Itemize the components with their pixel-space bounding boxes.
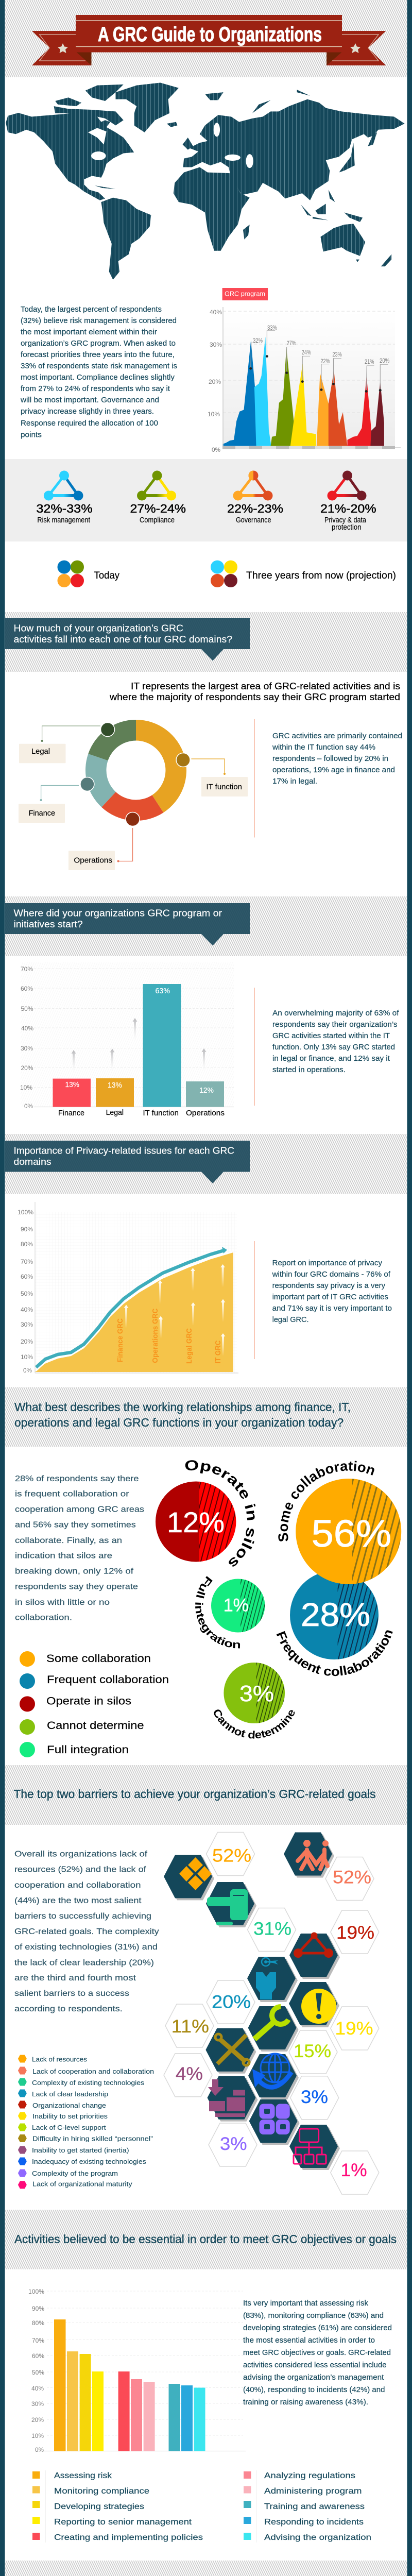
bubble: full integration 1%: Full integration bbox=[195, 1576, 240, 1649]
rotated domain labels: Legal GRC bbox=[185, 1328, 194, 1364]
bubble: cannot determine 3% bbox=[214, 1663, 295, 1739]
intro paragraph: organization’s GRC program. When asked to bbox=[21, 340, 176, 348]
rotated domain labels: Operations GRC bbox=[151, 1308, 160, 1363]
section header: working relationships: What best describes the working relationships among finance, IT, bbox=[14, 1400, 351, 1414]
panel: percentages band: Governance bbox=[236, 516, 271, 524]
intro paragraph: Response required the allocation of 100 bbox=[21, 419, 158, 428]
text: essential activities bbox=[243, 2299, 392, 2406]
hexagon percentages: 3% bbox=[220, 2134, 247, 2154]
panel: percentages band: Risk management bbox=[37, 516, 91, 524]
legend: barriers: Lack of clear leadership bbox=[32, 2090, 108, 2098]
bar chart: essential activities: 80% bbox=[32, 2319, 44, 2327]
intro paragraph: privacy increase slightly in three years. bbox=[21, 408, 154, 416]
text: barriers: (44%) are the two most salient bbox=[14, 1896, 142, 1905]
text: collaboration: indication that silos are bbox=[15, 1552, 112, 1560]
text: collaboration: in silos with little or no bbox=[15, 1598, 110, 1607]
text: barriers: salient barriers to a success bbox=[14, 1989, 129, 1998]
text: privacy report: within four GRC domains - 76% of bbox=[272, 1270, 391, 1279]
donut chart: GRC domains: Operations bbox=[74, 856, 112, 865]
value labels: 32% bbox=[253, 337, 263, 344]
legend: essential activities: Monitoring compliance bbox=[54, 2487, 149, 2496]
icon: resources diamonds bbox=[179, 1857, 212, 1890]
text: privacy report: and 71% say it is very important to bbox=[272, 1304, 392, 1313]
section header: privacy importance bbox=[5, 1134, 407, 1194]
intro paragraph: from 27% to 24% of respondents who say it bbox=[21, 385, 170, 393]
bar chart: essential activities: 20% bbox=[31, 2416, 44, 2424]
bar values: 13% bbox=[108, 1081, 122, 1090]
bar values: 63% bbox=[156, 987, 170, 995]
chart background bbox=[223, 311, 395, 446]
text: collaboration: 28% of respondents say there bbox=[15, 1475, 139, 1483]
legend: barriers: Lack of cooperation and collaboration bbox=[32, 2067, 154, 2075]
hexagon percentages: 20% bbox=[212, 1992, 251, 2012]
chart: GRC program: 27% bbox=[287, 340, 296, 347]
hexagon percentages: 11% bbox=[171, 2016, 209, 2037]
icon: inertia bbox=[208, 2079, 245, 2117]
text: barriers: resources (52%) and the lack of bbox=[14, 1866, 146, 1874]
percent figures and labels: 22%-23% bbox=[227, 502, 283, 515]
legend: essential activities: Assessing risk bbox=[54, 2471, 112, 2480]
text: collaboration: breaking down, only 12% of bbox=[15, 1567, 134, 1576]
area chart: privacy importance: 20% bbox=[21, 1338, 33, 1345]
chart: GRC program: 21% bbox=[365, 358, 374, 365]
text: barriers: according to respondents. bbox=[14, 2005, 123, 2013]
text: essential activities: activities considered less essential include bbox=[243, 2361, 386, 2369]
text: overwhelming majority bbox=[254, 988, 400, 1106]
donut chart: GRC domains: Finance bbox=[29, 809, 55, 818]
area chart: privacy importance: 90% bbox=[21, 1226, 33, 1233]
ground bar bbox=[222, 446, 395, 449]
area chart: privacy importance: 70% bbox=[21, 1258, 33, 1265]
bar chart: essential activities: 40% bbox=[31, 2385, 44, 2392]
percent figures and labels bbox=[36, 502, 376, 515]
bars bbox=[53, 1079, 91, 1107]
legend: essential activities: Administering program bbox=[264, 2487, 362, 2496]
text: overwhelming majority: started in operations. bbox=[272, 1066, 346, 1074]
hexagon percentages: 3% bbox=[301, 2087, 328, 2107]
text: GRC activities: within the IT function say 44% bbox=[272, 743, 375, 752]
text: GRC activities: respondents – followed by 20% in bbox=[272, 755, 388, 763]
legend: barriers: Complexity of the program bbox=[32, 2170, 118, 2177]
section header: working relationships: operations and legal GRC functions in your organization today? bbox=[14, 1416, 344, 1429]
legend: collaboration: Some collaboration bbox=[46, 1653, 151, 1665]
rotated domain labels: Finance GRC bbox=[116, 1318, 125, 1362]
text: privacy report: Report on importance of privacy bbox=[272, 1259, 383, 1267]
text: essential activities: (83%), monitoring compliance (63%) and bbox=[243, 2312, 384, 2320]
percent figures and labels: 27%-24% bbox=[130, 502, 186, 515]
axis labels: 70% bbox=[21, 965, 33, 973]
legend: barriers: Lack of organizational maturity bbox=[32, 2180, 132, 2188]
percent figures and labels: 32%-33% bbox=[36, 502, 93, 515]
text: privacy report bbox=[254, 1241, 392, 1359]
intro paragraph: points bbox=[21, 431, 42, 439]
intro paragraph: Today, the largest percent of respondents bbox=[21, 306, 162, 314]
panel: percentages band: Compliance bbox=[140, 516, 175, 524]
legend: barriers: Complexity of existing technologies bbox=[32, 2079, 145, 2087]
categories: Finance bbox=[58, 1109, 84, 1117]
bar chart: where GRC started: IT function bbox=[143, 1109, 179, 1117]
GRC program tag: GRC program bbox=[225, 290, 265, 298]
icon: risk management triangle bbox=[44, 471, 83, 501]
section header: privacy importance: Importance of Privacy-related issues for each GRC bbox=[13, 1146, 234, 1156]
text: collaboration: cooperation among GRC areas bbox=[15, 1505, 144, 1514]
bubble: some collaboration 56% bbox=[278, 1461, 402, 1584]
section header: privacy importance: domains bbox=[13, 1157, 52, 1167]
label boxes bbox=[19, 744, 248, 870]
percent figures and labels: 21%-20% bbox=[320, 502, 376, 515]
legend: barriers: Lack of C-level support bbox=[32, 2124, 106, 2131]
chart: GRC program: 22% bbox=[320, 358, 330, 365]
bar chart: where GRC started: Operations bbox=[186, 1109, 225, 1117]
text: privacy report: important part of IT GRC activities bbox=[272, 1293, 388, 1301]
bubble: operate in silos 12%: Operate in silos bbox=[185, 1460, 255, 1567]
hexagon percentages: 52% bbox=[333, 1868, 371, 1888]
bar chart: where GRC started bbox=[20, 962, 234, 1117]
header stripe panel bbox=[5, 0, 407, 77]
text: collaboration: and 56% say they sometimes bbox=[15, 1521, 136, 1530]
intro paragraph: (32%) believe risk management is considered bbox=[21, 317, 177, 325]
intro paragraph: forecast priorities three years into the future, bbox=[21, 351, 175, 359]
panel: percentages band: Privacy & data bbox=[324, 516, 367, 524]
bubble: some collaboration 56%: 56% bbox=[312, 1512, 391, 1555]
legend: collaboration: Frequent collaboration bbox=[47, 1674, 169, 1686]
legend: collaboration bbox=[20, 1651, 169, 1757]
section header: where started: initiatives start? bbox=[13, 919, 83, 929]
bar values: 12% bbox=[199, 1086, 214, 1095]
icon: organizational change bbox=[295, 1934, 332, 1957]
icon: priorities exclamation bbox=[301, 1989, 336, 2024]
chart: GRC program: 30% bbox=[210, 341, 222, 348]
connector lines bbox=[41, 726, 225, 861]
hexagon percentages: 15% bbox=[294, 2041, 331, 2061]
bubble: operate in silos 12% bbox=[156, 1460, 255, 1567]
bar chart: where GRC started: 10% bbox=[20, 1084, 32, 1091]
bar chart: where GRC started: 50% bbox=[21, 1005, 33, 1012]
hexagon percentages: 52% bbox=[212, 1845, 251, 1866]
bar chart: essential activities: 70% bbox=[32, 2337, 44, 2344]
legend: barriers: Inability to set priorities bbox=[32, 2112, 108, 2120]
text: GRC activities bbox=[254, 719, 402, 838]
text: essential activities: meet GRC objectives or goals. GRC-related bbox=[243, 2349, 391, 2357]
bar chart: essential activities: 60% bbox=[32, 2352, 44, 2360]
legend: today vs projection bbox=[58, 561, 396, 587]
bar chart: where GRC started: 40% bbox=[21, 1025, 33, 1032]
legend: barriers: Lack of resources bbox=[32, 2055, 88, 2063]
text: barriers: the lack of clear leadership (20%) bbox=[14, 1959, 154, 1967]
chart: GRC program: 24% bbox=[302, 349, 311, 356]
legend: essential activities: Reporting to senior management bbox=[54, 2518, 192, 2527]
section header: where started bbox=[5, 896, 407, 956]
chart: GRC program: 23% bbox=[332, 351, 342, 358]
hexagon percentages bbox=[171, 1845, 374, 2180]
bubble: cannot determine 3%: Cannot determine bbox=[214, 1709, 295, 1739]
icon: org chart bbox=[294, 2129, 326, 2164]
text: collaboration: collaborate. Finally, as an bbox=[15, 1536, 122, 1545]
text: overwhelming majority: in legal or finance, and 12% say it bbox=[272, 1055, 390, 1063]
bubble: frequent collaboration 28%: Frequent collaboration bbox=[276, 1630, 393, 1676]
legend: essential activities: Advising the organization bbox=[264, 2533, 371, 2542]
intro paragraph: most important. Compliance declines slightly bbox=[21, 374, 175, 382]
text: barriers: GRC-related goals. The complexity bbox=[14, 1927, 159, 1936]
text: overwhelming majority: An overwhelming majority of 63% of bbox=[272, 1009, 400, 1018]
icon: compliance triangle bbox=[137, 471, 176, 501]
section header: GRC domains: activities fall into each one of four GRC domains? bbox=[13, 634, 232, 645]
icon: people bbox=[298, 1840, 329, 1869]
icon: leadership bbox=[256, 1958, 278, 1999]
area chart: privacy importance: 60% bbox=[21, 1273, 33, 1280]
bar values: 13% bbox=[65, 1080, 79, 1089]
bars bbox=[54, 2319, 66, 2451]
legend: barriers: Inadequacy of existing technologies bbox=[32, 2158, 146, 2165]
icon: technology bbox=[207, 1889, 248, 1925]
hexagon percentages: 31% bbox=[253, 1919, 291, 1939]
text: overwhelming majority: function. Only 13% say GRC started bbox=[272, 1043, 395, 1052]
icon: tools bbox=[215, 2034, 249, 2065]
arrows bbox=[71, 1018, 206, 1074]
section header: working relationships bbox=[5, 1387, 407, 1447]
intro paragraph bbox=[20, 306, 177, 439]
legend: collaboration: Cannot determine bbox=[47, 1720, 144, 1732]
area chart: privacy importance: 40% bbox=[21, 1306, 33, 1313]
text: essential activities: developing strategies (61%) are considered bbox=[243, 2324, 392, 2332]
hexagon percentages: 1% bbox=[341, 2160, 367, 2180]
icon: wrench bbox=[254, 2007, 288, 2039]
legend: collaboration: Full integration bbox=[47, 1744, 129, 1756]
area chart: privacy importance: 10% bbox=[21, 1353, 33, 1361]
hexagon percentages: 19% bbox=[336, 1923, 374, 1943]
axis labels: 40% bbox=[210, 309, 222, 316]
text: barriers: are the third and fourth most bbox=[14, 1974, 136, 1982]
icon: privacy triangle bbox=[328, 471, 367, 501]
text: collaboration: is frequent collaboration or bbox=[15, 1490, 129, 1498]
hexagon values bbox=[164, 1832, 379, 2194]
section header: centralized bbox=[5, 2561, 407, 2576]
bar chart: essential activities: 90% bbox=[32, 2305, 44, 2312]
bubble: operate in silos 12%: 12% bbox=[167, 1506, 225, 1538]
legend: barriers bbox=[18, 2055, 154, 2189]
bar chart: essential activities bbox=[28, 2288, 246, 2453]
text: collaboration bbox=[15, 1475, 144, 1622]
bubble: frequent collaboration 28%: 28% bbox=[301, 1596, 370, 1633]
text: overwhelming majority: GRC activities started within the IT bbox=[272, 1032, 390, 1040]
legend: collaboration: Operate in silos bbox=[46, 1695, 131, 1707]
bubble: frequent collaboration 28% bbox=[276, 1574, 393, 1676]
legend: essential activities: Responding to incidents bbox=[264, 2518, 364, 2527]
hexagon icons background bbox=[164, 1832, 340, 2170]
text: barriers: Overall its organizations lack of bbox=[14, 1850, 148, 1859]
axis labels: 100% bbox=[28, 2288, 44, 2295]
section header: GRC domains: How much of your organization’s GRC bbox=[13, 623, 183, 634]
intro paragraph: 33% of respondents state risk management is bbox=[21, 362, 177, 370]
chart: GRC program: 20% bbox=[380, 357, 390, 364]
section header: essential activities bbox=[5, 2210, 407, 2269]
hexagon percentages: 4% bbox=[176, 2064, 203, 2084]
GRC program tag bbox=[222, 288, 268, 300]
text: essential activities: training or raising awareness (43%). bbox=[243, 2398, 368, 2406]
subheading: where the majority of respondents say their GRC program started bbox=[109, 692, 400, 702]
white arrows bbox=[124, 1264, 226, 1356]
area chart: privacy importance: 50% bbox=[21, 1290, 33, 1297]
bar chart: where GRC started: 60% bbox=[21, 985, 33, 992]
bubble: full integration 1%: 1% bbox=[224, 1596, 249, 1616]
legend: barriers: Organizational change bbox=[32, 2102, 106, 2109]
bubble: full integration 1% bbox=[195, 1576, 265, 1649]
text: collaboration: collaboration. bbox=[15, 1614, 72, 1622]
area chart: privacy importance: 80% bbox=[21, 1241, 33, 1248]
axes and grid bbox=[223, 311, 395, 413]
rotated domain labels bbox=[116, 1308, 222, 1364]
text: barriers: barriers to successfully achieving bbox=[14, 1912, 151, 1921]
bar chart: essential activities: 10% bbox=[31, 2432, 44, 2439]
bar chart: essential activities: 0% bbox=[35, 2446, 44, 2453]
text: privacy report: respondents say privacy is a very bbox=[272, 1282, 386, 1290]
text: essential activities: (40%), responding to incidents (42%) and bbox=[243, 2386, 385, 2394]
text: GRC activities: 17% in legal. bbox=[272, 777, 317, 786]
bar chart: essential activities: 50% bbox=[32, 2369, 44, 2376]
text: privacy report: legal GRC. bbox=[272, 1316, 309, 1324]
bubble: cannot determine 3%: 3% bbox=[239, 1681, 274, 1706]
bar chart: where GRC started: 30% bbox=[21, 1045, 33, 1052]
text: collaboration: respondents say they operate bbox=[15, 1583, 138, 1591]
subheading: IT represents the largest area of GRC-related activities and is bbox=[131, 681, 400, 691]
legend: today vs projection: Today bbox=[94, 570, 119, 581]
donut chart: GRC domains: Legal bbox=[31, 747, 50, 756]
text: overwhelming majority: respondents say their organization’s bbox=[272, 1021, 398, 1029]
donut chart: GRC domains bbox=[19, 720, 248, 870]
text: barriers bbox=[14, 1850, 159, 2013]
section header: where started: Where did your organizations GRC program or bbox=[13, 908, 222, 919]
bubble: some collaboration 56%: Some collaboration bbox=[278, 1461, 374, 1541]
chart: GRC program: 20% bbox=[209, 378, 221, 385]
intro paragraph: the most important element within their bbox=[21, 328, 157, 336]
section header: barriers bbox=[5, 1765, 407, 1825]
chart: GRC program: 0% bbox=[212, 446, 220, 453]
area chart: privacy importance: 30% bbox=[21, 1321, 33, 1328]
title: A GRC Guide to Organizations bbox=[98, 23, 322, 46]
bar chart: essential activities: 30% bbox=[31, 2400, 44, 2408]
icon: governance triangle bbox=[233, 471, 273, 501]
panel: percentages band bbox=[5, 459, 407, 541]
donut chart: GRC domains: IT function bbox=[206, 783, 242, 791]
chart: GRC program: 10% bbox=[208, 411, 220, 418]
bar chart: where GRC started: Legal bbox=[106, 1108, 124, 1117]
icon: globe bbox=[252, 2054, 291, 2088]
legend: barriers: Inability to get started (inertia) bbox=[32, 2146, 129, 2154]
text: essential activities: the most essential activities in order to bbox=[243, 2336, 375, 2345]
text: essential activities: advising the organization’s management bbox=[243, 2374, 384, 2382]
icon: program complexity squares bbox=[260, 2104, 290, 2134]
chart: GRC program: 33% bbox=[267, 324, 277, 331]
legend: essential activities: Analyzing regulations bbox=[264, 2471, 355, 2480]
area chart: privacy importance: 0% bbox=[23, 1367, 32, 1374]
hexagon percentages: 19% bbox=[335, 2019, 373, 2039]
section header: GRC domains bbox=[5, 612, 407, 672]
legend: essential activities bbox=[32, 2470, 371, 2543]
bar chart: where GRC started: 0% bbox=[24, 1103, 33, 1110]
panel: percentages band: protection bbox=[332, 523, 362, 532]
text: barriers: cooperation and collaboration bbox=[14, 1881, 141, 1890]
text: GRC activities: operations, 19% age in finance and bbox=[272, 766, 395, 774]
legend: today vs projection: Three years from now (projection) bbox=[246, 570, 396, 581]
section header: essential activities: Activities believed to be essential in order to meet GRC objectives or goals bbox=[14, 2232, 397, 2246]
bar values bbox=[65, 987, 214, 1095]
text: GRC activities: GRC activities are primarily contained bbox=[272, 732, 402, 740]
legend: barriers: Difficulty in hiring skilled “personnel” bbox=[32, 2135, 153, 2142]
text: essential activities: Its very important that assessing risk bbox=[243, 2299, 369, 2308]
chart: GRC program bbox=[208, 288, 401, 453]
peaks bbox=[222, 331, 388, 446]
legend: essential activities: Creating and implementing policies bbox=[54, 2533, 203, 2542]
legend: essential activities: Developing strategies bbox=[54, 2502, 144, 2511]
section header: barriers: The top two barriers to achieve your organization’s GRC-related goals bbox=[13, 1787, 376, 1801]
intro paragraph: will be most important. Governance and bbox=[20, 396, 159, 404]
legend: essential activities: Training and awareness bbox=[264, 2502, 365, 2511]
area chart: privacy importance bbox=[18, 1202, 238, 1374]
title ribbon bbox=[32, 15, 386, 65]
rotated domain labels: IT GRC bbox=[214, 1340, 222, 1364]
text: barriers: of existing technologies (31%) and bbox=[14, 1943, 158, 1952]
bar chart: where GRC started: 20% bbox=[21, 1064, 33, 1072]
subheading bbox=[109, 681, 400, 702]
axis labels: 100% bbox=[18, 1209, 33, 1216]
world map bbox=[6, 83, 405, 280]
